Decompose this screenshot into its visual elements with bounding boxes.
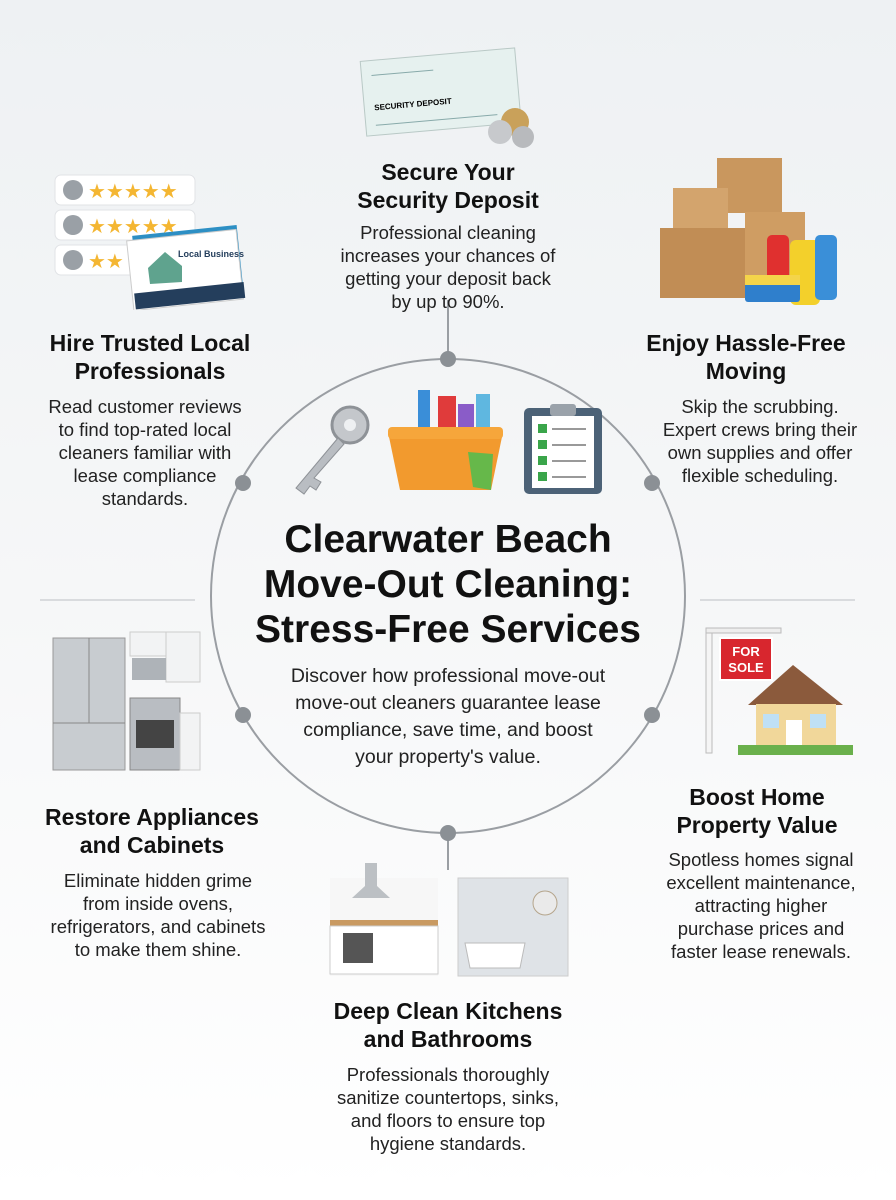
icon: house with for sale sign xyxy=(706,628,853,755)
text: appliances description: from inside ovens, xyxy=(83,893,233,914)
text: moving description: Skip the scrubbing. xyxy=(681,396,839,417)
heading: boost home property value: Boost Home xyxy=(689,784,825,810)
subtitle: compliance, save time, and boost xyxy=(303,719,593,741)
icon: reviews and business cards: ★★ xyxy=(88,249,124,273)
icon: house with for sale sign: FOR xyxy=(732,644,760,659)
text: property value description: purchase prices and xyxy=(678,918,844,939)
text: moving description xyxy=(663,396,857,486)
heading: enjoy hassle-free moving: Enjoy Hassle-Free xyxy=(646,330,846,356)
icon: reviews and business cards xyxy=(54,174,246,310)
text: property value description: Spotless homes signal xyxy=(668,849,854,870)
heading: deep clean kitchens and bathrooms: and Bathrooms xyxy=(364,1026,532,1052)
text: appliances description: Eliminate hidden grime xyxy=(64,870,252,891)
subtitle xyxy=(291,665,606,768)
subtitle: Discover how professional move-out xyxy=(291,665,605,687)
heading: hire trusted local professionals: Professionals xyxy=(75,358,225,384)
icon: reviews and business cards: Local Business xyxy=(178,249,244,259)
text: appliances description: refrigerators, and cabinets xyxy=(51,916,265,937)
icon: clipboard checklist xyxy=(524,404,602,494)
icon: house with for sale sign: SOLE xyxy=(728,660,764,675)
text: kitchens description xyxy=(337,1064,559,1154)
icon: security deposit check xyxy=(360,47,534,148)
heading: boost home property value xyxy=(676,784,838,838)
text: property value description xyxy=(666,849,856,962)
text: kitchens description: Professionals thoroughly xyxy=(347,1064,549,1085)
icon: security deposit check: SECURITY DEPOSIT xyxy=(374,97,452,112)
text: property value description: attracting higher xyxy=(695,895,827,916)
subtitle: your property's value. xyxy=(355,746,541,768)
heading: deep clean kitchens and bathrooms: Deep Clean Kitchens xyxy=(334,998,562,1024)
title xyxy=(255,518,641,651)
icon: moving boxes and cleaning supplies xyxy=(660,158,837,305)
heading: enjoy hassle-free moving: Moving xyxy=(706,358,786,384)
icon: reviews and business cards: ★★★★★ xyxy=(88,214,178,238)
text: deposit description: by up to 90%. xyxy=(391,291,505,312)
text: hire description: Read customer reviews xyxy=(48,396,242,417)
text: hire description: cleaners familiar with xyxy=(59,442,231,463)
text: kitchens description: sanitize countertops, sinks, xyxy=(337,1087,559,1108)
text: appliances description xyxy=(51,870,265,960)
text: deposit description: increases your chances of xyxy=(341,245,555,266)
heading: secure your security deposit: Secure Your xyxy=(381,159,515,185)
heading: secure your security deposit: Security Deposit xyxy=(357,187,539,213)
heading: hire trusted local professionals xyxy=(50,330,250,384)
icon: key xyxy=(295,406,370,495)
text: deposit description: getting your deposit back xyxy=(345,268,551,289)
text: hire description: to find top-rated local xyxy=(59,419,231,440)
text: appliances description: to make them shine. xyxy=(75,939,241,960)
text: hire description: lease compliance xyxy=(74,465,216,486)
text: hire description: standards. xyxy=(102,488,188,509)
text: kitchens description: and floors to ensure top xyxy=(351,1110,545,1131)
title: Move-Out Cleaning: xyxy=(264,563,632,606)
icon: kitchen and bathroom xyxy=(330,863,568,976)
subtitle: move-out cleaners guarantee lease xyxy=(295,692,601,714)
icon: reviews and business cards: ★★★★★ xyxy=(88,179,178,203)
heading: restore appliances and cabinets xyxy=(45,804,259,858)
heading: secure your security deposit xyxy=(357,159,539,213)
heading: deep clean kitchens and bathrooms xyxy=(334,998,562,1052)
icon: cleaning basket xyxy=(388,390,503,490)
text: moving description: Expert crews bring their xyxy=(663,419,857,440)
text: hire description xyxy=(48,396,242,509)
text: kitchens description: hygiene standards. xyxy=(370,1133,526,1154)
text: moving description: flexible scheduling. xyxy=(682,465,838,486)
text: deposit description: Professional cleaning xyxy=(360,222,536,243)
heading: enjoy hassle-free moving xyxy=(646,330,846,384)
text: property value description: excellent maintenance, xyxy=(666,872,856,893)
title: Stress-Free Services xyxy=(255,608,641,651)
heading: boost home property value: Property Value xyxy=(676,812,838,838)
heading: restore appliances and cabinets: Restore Appliances xyxy=(45,804,259,830)
heading: hire trusted local professionals: Hire Trusted Local xyxy=(50,330,250,356)
heading: restore appliances and cabinets: and Cabinets xyxy=(80,832,224,858)
icon: kitchen appliances xyxy=(52,632,200,770)
text: deposit description xyxy=(341,222,556,312)
text: moving description: own supplies and offer xyxy=(668,442,852,463)
text: property value description: faster lease renewals. xyxy=(671,941,851,962)
title: Clearwater Beach xyxy=(284,518,612,561)
